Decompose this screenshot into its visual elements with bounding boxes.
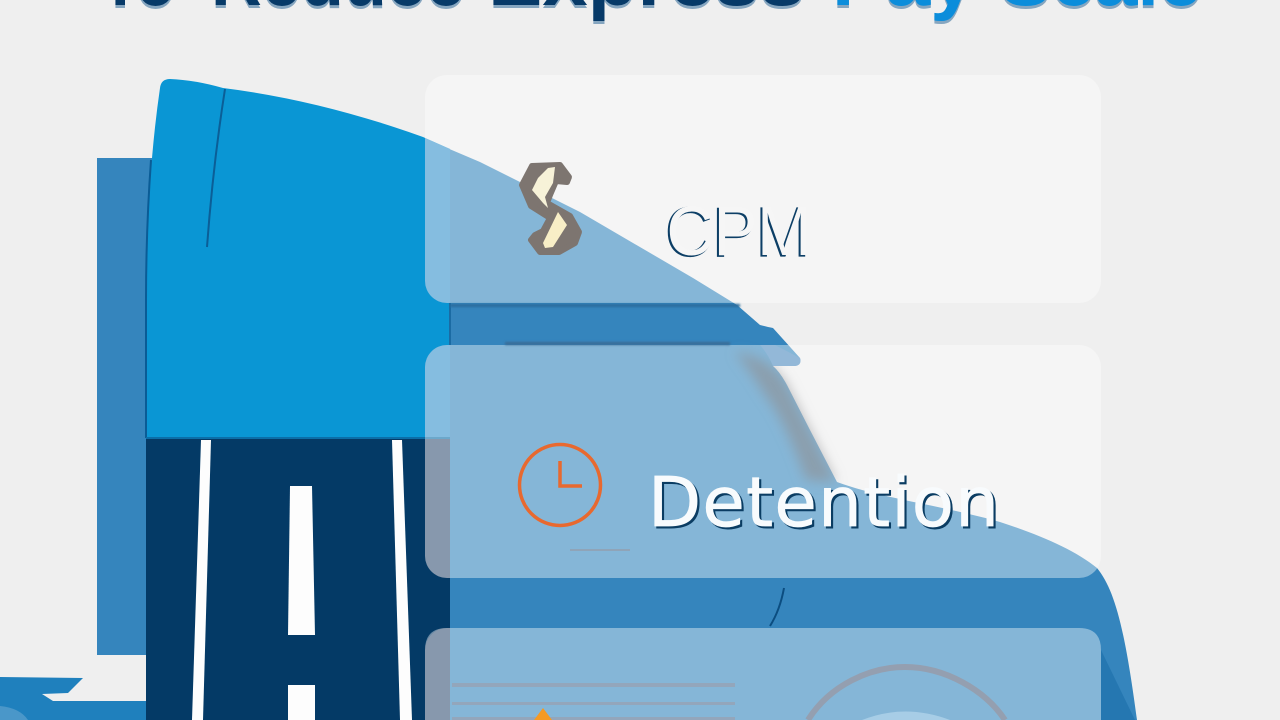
panel: CPM xyxy=(425,75,1101,307)
card background xyxy=(425,345,1101,578)
left road line xyxy=(192,440,211,720)
card background xyxy=(425,75,1101,303)
seam line xyxy=(449,303,451,345)
lower left mirror bracket xyxy=(0,677,146,720)
card edge tints xyxy=(425,138,450,720)
panel: Detention xyxy=(425,342,1101,578)
card underside shadow xyxy=(450,304,740,307)
cab body silhouette xyxy=(440,145,1137,720)
label: Detention: Detention xyxy=(650,465,1001,545)
truck illustration xyxy=(0,79,1137,720)
visor tip xyxy=(760,345,800,366)
cab lower right shading xyxy=(1101,650,1135,720)
card background xyxy=(425,628,1101,720)
cab crease line xyxy=(207,89,225,247)
road panel top edge xyxy=(146,437,450,439)
truck rear panel xyxy=(97,158,157,655)
cab left edge line xyxy=(146,160,151,438)
label: CPM: CPM xyxy=(666,192,812,270)
icon: clock xyxy=(520,444,600,526)
card top shadow xyxy=(505,342,730,345)
icon: dollar S xyxy=(522,165,579,252)
panel: third card xyxy=(425,628,1101,720)
navy road panel xyxy=(146,438,450,720)
icon: orange triangle xyxy=(534,708,552,720)
door line xyxy=(770,588,784,626)
cab upper blue section xyxy=(146,79,450,438)
right road line xyxy=(392,440,412,720)
label: CPM: CPM xyxy=(665,193,810,271)
wheel hub xyxy=(862,712,950,720)
wheel arc xyxy=(808,667,1005,720)
road centre dash upper xyxy=(288,486,315,635)
road centre dash lower xyxy=(288,685,315,720)
text placeholder lines xyxy=(452,683,735,720)
windshield shadow xyxy=(735,352,836,482)
label: Detention: Detention xyxy=(648,463,999,543)
title xyxy=(100,0,1202,25)
faint underline xyxy=(570,549,630,551)
